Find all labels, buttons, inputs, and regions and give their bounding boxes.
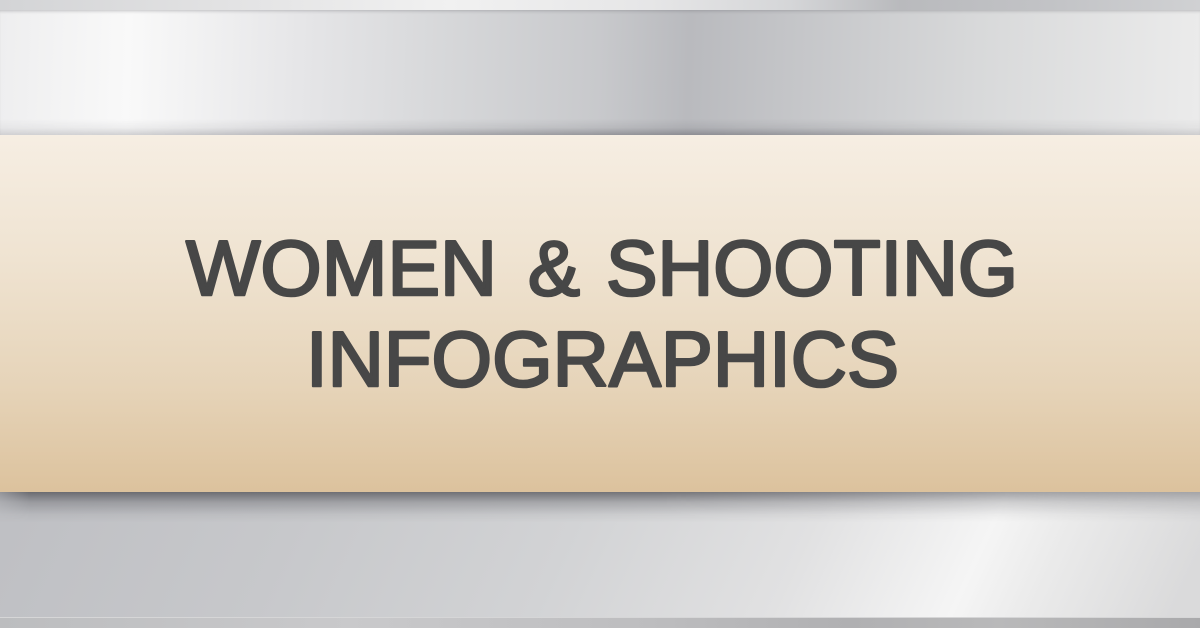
title text: INFOGRAPHICS xyxy=(306,315,899,403)
title text: & xyxy=(528,224,580,312)
upper metal panel xyxy=(0,10,1200,135)
title text: SHOOTING xyxy=(606,224,1018,312)
lower panel shadow xyxy=(0,492,1200,516)
upper panel shadow xyxy=(0,124,1200,135)
top metal strip xyxy=(0,0,1200,10)
lower metal panel xyxy=(0,492,1200,618)
title banner xyxy=(0,135,1200,492)
bottom metal strip xyxy=(0,618,1200,628)
title text xyxy=(185,224,1018,403)
title text: WOMEN xyxy=(186,224,497,312)
